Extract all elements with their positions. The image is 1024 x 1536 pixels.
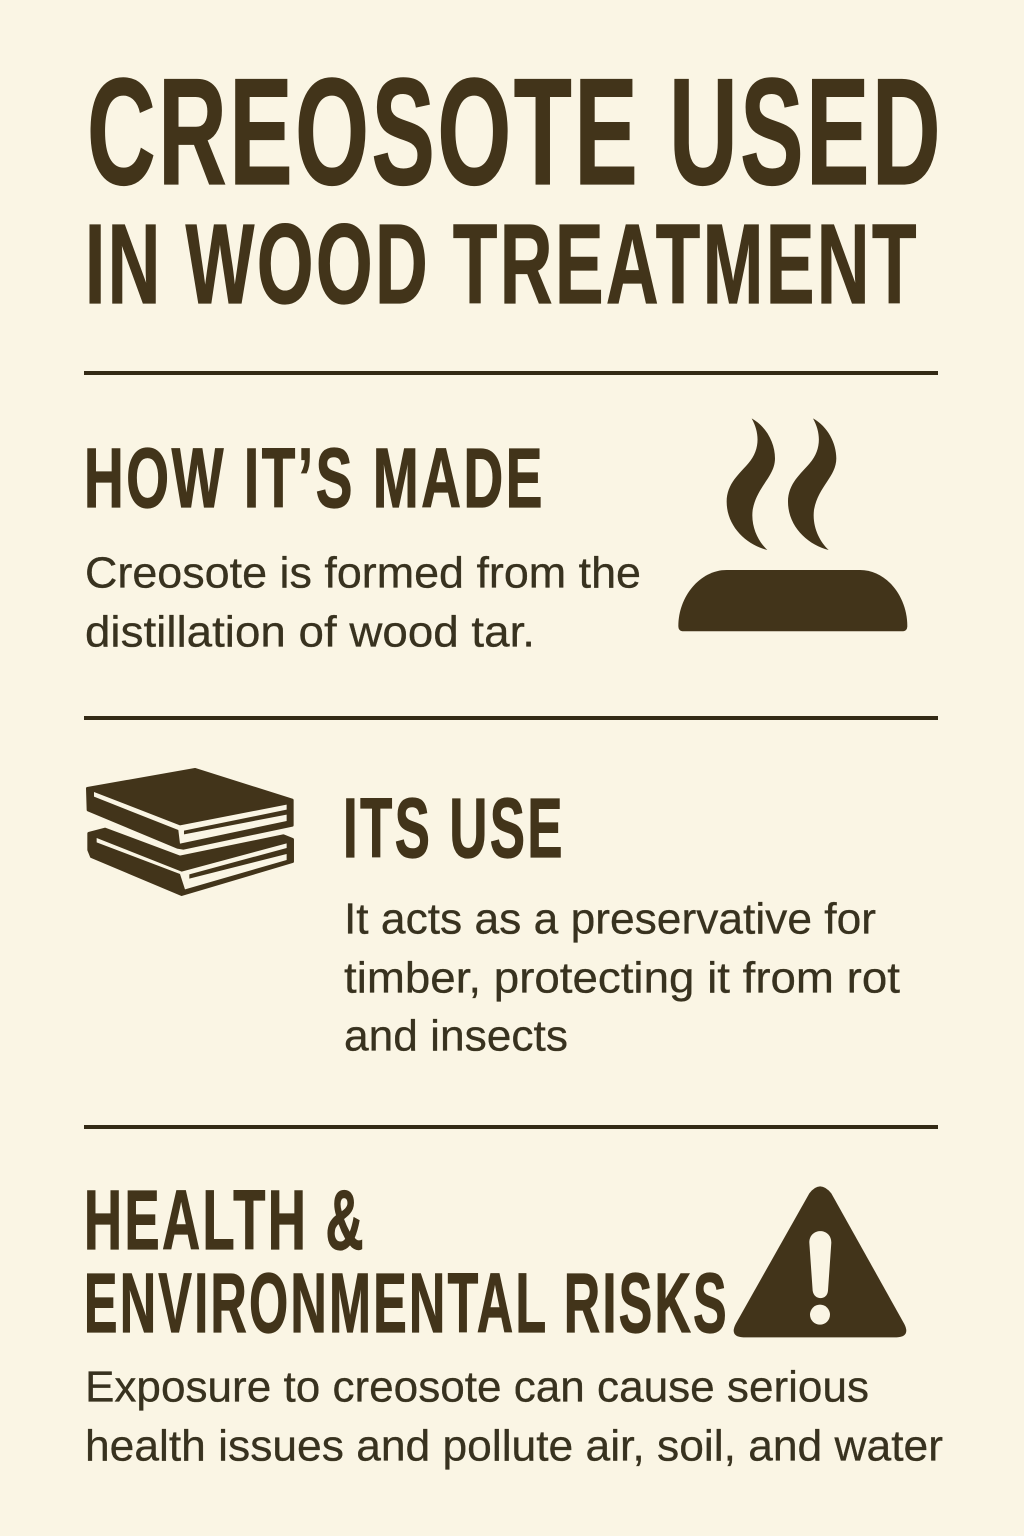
- text: its use: and insects: [344, 1012, 568, 1060]
- panel: health and environmental risks: [84, 1173, 943, 1470]
- text: health and environmental risks: [85, 1362, 943, 1470]
- heading: health and environmental risks: HEALTH &: [84, 1173, 366, 1267]
- panel: its use: [87, 769, 900, 1060]
- icon: stacked timber boards: [87, 769, 293, 895]
- heading: health and environmental risks: [84, 1173, 729, 1350]
- text: how it's made: [85, 548, 641, 656]
- text: how it's made: Creosote is formed from the: [85, 548, 641, 598]
- text: its use: It acts as a preservative for: [344, 894, 876, 944]
- heading: its use: ITS USE: [343, 781, 565, 875]
- text: health and environmental risks: health issues and pollute air, soil, and water: [85, 1422, 943, 1470]
- icon: warning triangle: [734, 1186, 906, 1337]
- icon: steam rising from creosote mound: [678, 418, 907, 631]
- text: health and environmental risks: Exposure to creosote can cause serious: [85, 1362, 869, 1412]
- text: its use: [344, 894, 900, 1060]
- heading: how it's made: HOW IT’S MADE: [84, 431, 545, 525]
- panel: how it's made: [84, 418, 907, 656]
- text: its use: timber, protecting it from rot: [344, 954, 900, 1002]
- text: how it's made: distillation of wood tar.: [85, 608, 535, 656]
- title: [85, 47, 943, 327]
